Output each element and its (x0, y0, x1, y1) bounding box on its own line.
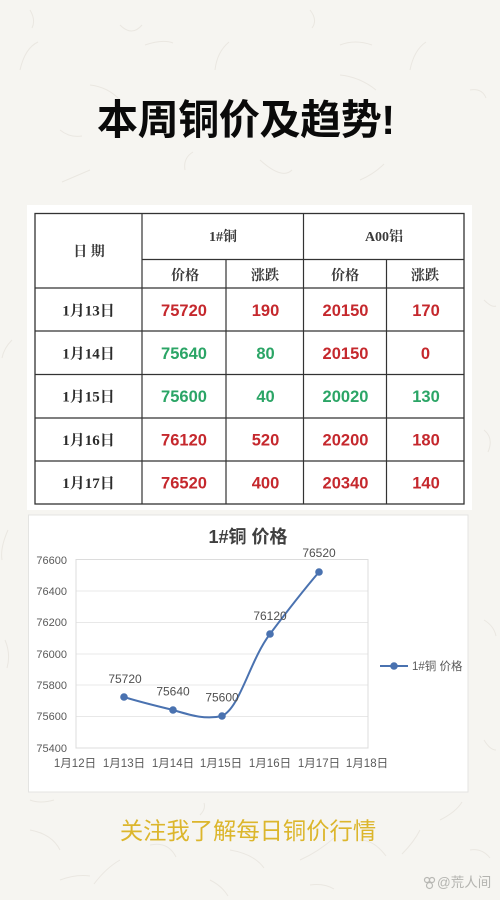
table header: 日 期 (73, 244, 105, 260)
table red values: 400 (252, 474, 279, 492)
icon: watermark paw (424, 878, 434, 888)
table red values: 190 (252, 302, 279, 320)
data labels (108, 546, 336, 704)
y axis labels: 76400 (36, 586, 67, 598)
table red values: 20150 (323, 302, 368, 320)
table red values: 180 (412, 432, 440, 450)
x axis labels (54, 758, 388, 770)
chart title: 1#铜 价格 (208, 527, 288, 547)
data labels: 75600 (205, 690, 239, 704)
table date column (62, 302, 115, 492)
table red values (161, 302, 440, 492)
x axis labels: 1月13日 (103, 758, 145, 770)
data labels: 75720 (108, 672, 142, 686)
watermark: @荒人间 (437, 875, 491, 890)
table header: 价格 (331, 267, 359, 284)
table red values: 75720 (161, 302, 207, 320)
table green values: 40 (256, 388, 275, 406)
table header (73, 228, 439, 284)
table green values: 80 (256, 345, 275, 363)
table header: A00铝 (365, 229, 403, 245)
table date column: 1月17日 (62, 475, 115, 492)
table red values: 170 (412, 302, 440, 320)
x axis labels: 1月16日 (249, 758, 291, 770)
table green values: 75600 (161, 388, 207, 406)
table red values: 20340 (323, 474, 368, 492)
table green values: 75640 (161, 345, 207, 363)
price line series (120, 568, 323, 720)
table date column: 1月15日 (62, 388, 115, 406)
panel: price table (27, 205, 472, 510)
footer call to action: 关注我了解每日铜价行情 (120, 818, 376, 844)
x axis labels: 1月14日 (152, 758, 194, 770)
table red values: 20150 (323, 345, 368, 363)
y axis labels: 75800 (36, 680, 67, 692)
table red values: 520 (252, 432, 279, 450)
chart legend (380, 659, 463, 673)
table date column: 1月16日 (62, 432, 115, 449)
table header: 1#铜 (209, 228, 237, 245)
x axis labels: 1月17日 (298, 758, 340, 770)
panel: line chart (28, 515, 468, 792)
table header: 涨跌 (251, 267, 279, 284)
table red values: 76520 (161, 474, 207, 492)
x axis labels: 1月12日 (54, 758, 96, 770)
y axis labels (36, 555, 67, 755)
x axis labels: 1月15日 (200, 758, 242, 770)
table green values: 20020 (323, 388, 368, 406)
table green values: 130 (412, 388, 440, 406)
data labels: 76520 (302, 546, 336, 560)
data labels: 76120 (253, 609, 287, 623)
y axis labels: 75400 (36, 743, 67, 755)
table green values (161, 345, 440, 406)
data labels: 75640 (156, 684, 190, 698)
table date column: 1月14日 (62, 346, 115, 362)
table header: 涨跌 (411, 267, 439, 284)
table red values: 140 (412, 474, 440, 492)
table red values: 76120 (161, 432, 207, 450)
title: 本周铜价及趋势! (97, 97, 395, 143)
table header: 价格 (171, 267, 199, 284)
y axis labels: 76000 (36, 649, 67, 661)
x axis labels: 1月18日 (346, 758, 388, 770)
y axis labels: 75600 (36, 711, 67, 723)
chart legend: 1#铜 价格 (412, 659, 463, 673)
y axis labels: 76600 (36, 555, 67, 567)
chart plot area (76, 560, 368, 748)
table red values: 20200 (323, 432, 368, 450)
y axis labels: 76200 (36, 617, 67, 629)
table red values: 0 (421, 345, 430, 363)
table date column: 1月13日 (62, 302, 115, 320)
